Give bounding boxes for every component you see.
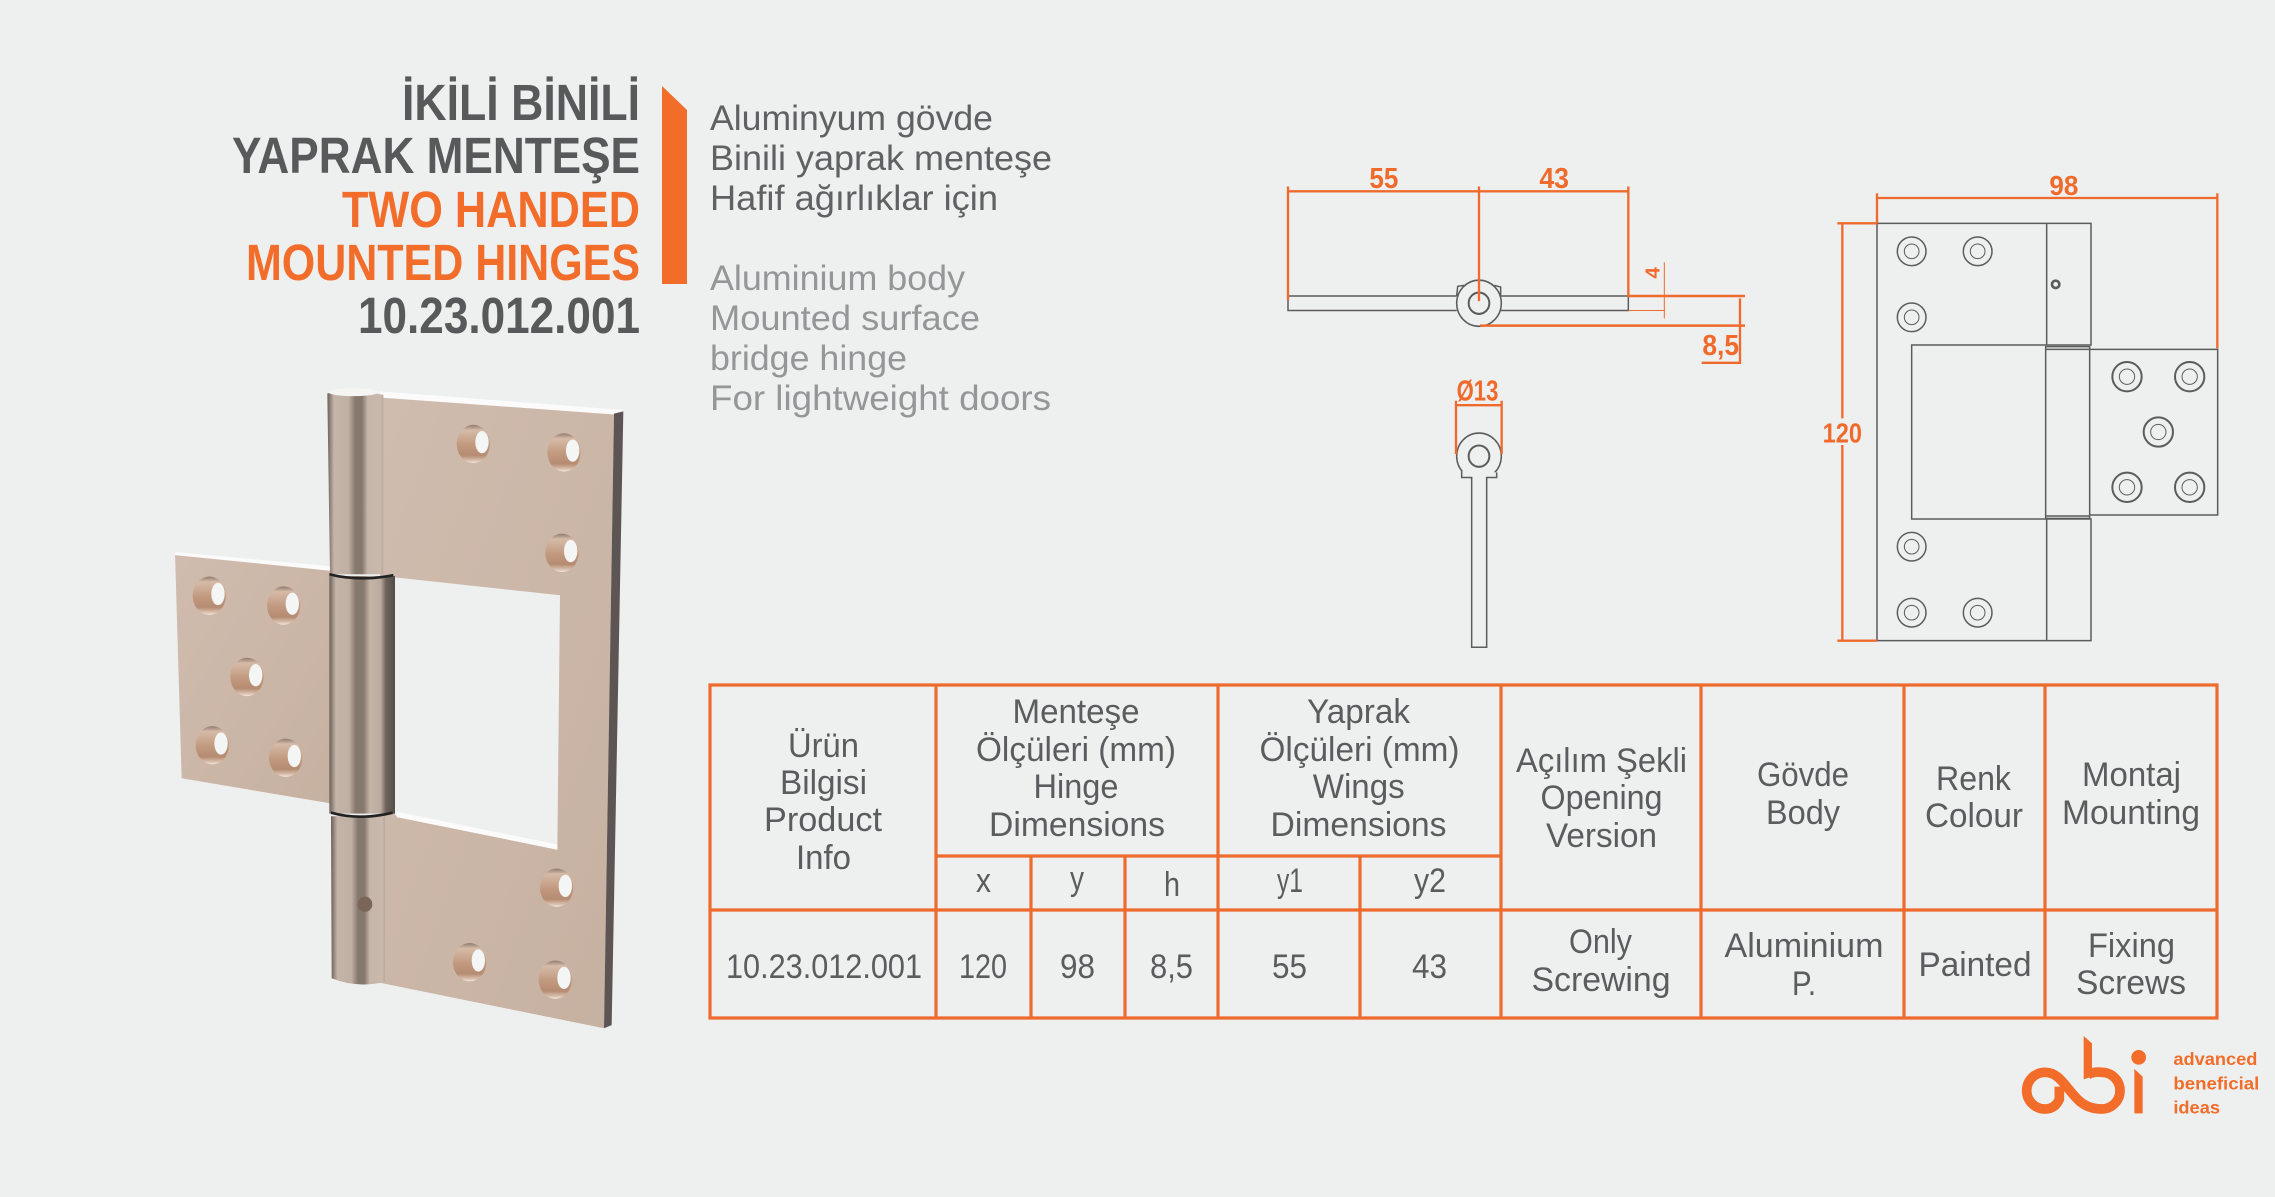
table header: colour [1925,760,2023,835]
description: English: Mounted surface [710,299,980,338]
table header: hinge dimensions [976,693,1176,844]
table data row: 55 [1272,948,1307,986]
table header: wings dimensions: Wings [1313,768,1405,806]
description: English: bridge hinge [710,339,907,378]
table header: wings dimensions: Ölçüleri (mm) [1260,731,1460,769]
table header: body: Gövde [1757,756,1849,794]
description: Turkish: Aluminyum gövde [710,99,993,138]
description: Turkish [710,99,1052,218]
table sub-headers: x y h y1 y2: h [1164,866,1180,904]
product image: hinge [175,388,623,1028]
table data row: 43 [1412,948,1447,986]
table header: body: Body [1766,794,1840,832]
table sub-headers: x y h y1 y2: y2 [1414,862,1446,900]
table header: wings dimensions [1260,693,1460,844]
table header: mounting: Mounting [2062,794,2200,832]
technical drawing: top section view with dimensions: 55 [1369,163,1398,194]
table data row: 120 [959,948,1007,986]
table header: product info: Product [764,801,883,839]
technical drawing: pin section view [1456,375,1502,647]
title block: YAPRAK MENTEŞE [232,127,640,184]
table header: wings dimensions: Yaprak [1307,693,1411,731]
table header: product info [764,727,883,877]
table data row [726,923,2186,1003]
table data row: Only [1569,923,1632,961]
table header: mounting: Montaj [2082,756,2181,794]
title block [232,74,640,344]
description: Turkish: Hafif ağırlıklar için [710,179,998,218]
table data row: 8,5 [1150,948,1193,986]
table header: hinge dimensions: Dimensions [989,806,1165,844]
table header: hinge dimensions: Hinge [1034,768,1118,806]
specification table [710,685,2217,1018]
table header: mounting [2062,756,2200,832]
table data row: 10.23.012.001 [726,948,922,986]
table data row: Aluminium [1724,927,1884,965]
table header: colour: Renk [1936,760,2012,798]
logo: abi advanced beneficial ideas: ideas [2173,1097,2220,1117]
technical drawing: top section view with dimensions [1288,163,1745,364]
orange accent bar [662,86,687,284]
table header: hinge dimensions: Ölçüleri (mm) [976,731,1176,769]
logo: abi advanced beneficial ideas [2027,1036,2259,1117]
table data row: Screws [2076,964,2186,1002]
description: English [710,259,1051,418]
description: English: Aluminium body [710,259,966,298]
title block: TWO HANDED [342,181,640,238]
title block: 10.23.012.001 [358,287,640,344]
table sub-headers: x y h y1 y2: x [976,862,991,900]
logo: abi advanced beneficial ideas: beneficial [2173,1073,2259,1093]
table header: opening version: Opening [1540,779,1662,817]
table header: wings dimensions: Dimensions [1270,806,1446,844]
table header: body [1757,756,1849,832]
table data row: 98 [1060,948,1095,986]
table data row: Fixing [2088,927,2175,965]
table data row: P. [1792,965,1816,1003]
logo: abi advanced beneficial ideas: advanced [2173,1049,2257,1069]
title block: İKİLİ BİNİLİ [402,74,640,131]
technical drawing: front view with dimensions: 98 [2049,170,2078,201]
technical drawing: top section view with dimensions: 43 [1539,163,1569,194]
table header: product info: Bilgisi [780,764,867,802]
technical drawing: top section view with dimensions: 4 [1642,267,1664,278]
title block: MOUNTED HINGES [246,234,640,291]
technical drawing: front view with dimensions: 120 [1823,418,1862,449]
table header: colour: Colour [1925,797,2023,835]
technical drawing: top section view with dimensions: 8,5 [1702,330,1739,361]
table header: opening version: Version [1546,817,1657,855]
description: Turkish: Binili yaprak menteşe [710,139,1052,178]
table data row: Screwing [1532,961,1670,999]
table data row: Painted [1918,946,2032,984]
technical drawing: front view with dimensions [1823,170,2218,641]
table header: product info: Info [796,839,851,877]
technical drawing: pin section view: Ø13 [1457,375,1498,407]
table sub-headers: x y h y1 y2: y [1070,860,1084,898]
table sub-headers: x y h y1 y2: y1 [1277,862,1303,900]
table header: hinge dimensions: Menteşe [1012,693,1140,731]
description: English: For lightweight doors [710,379,1051,418]
table header: opening version: Açılım Şekli [1516,742,1687,780]
table header: opening version [1516,742,1687,855]
table header: product info: Ürün [788,727,859,765]
table sub-headers: x y h y1 y2 [976,860,1446,904]
